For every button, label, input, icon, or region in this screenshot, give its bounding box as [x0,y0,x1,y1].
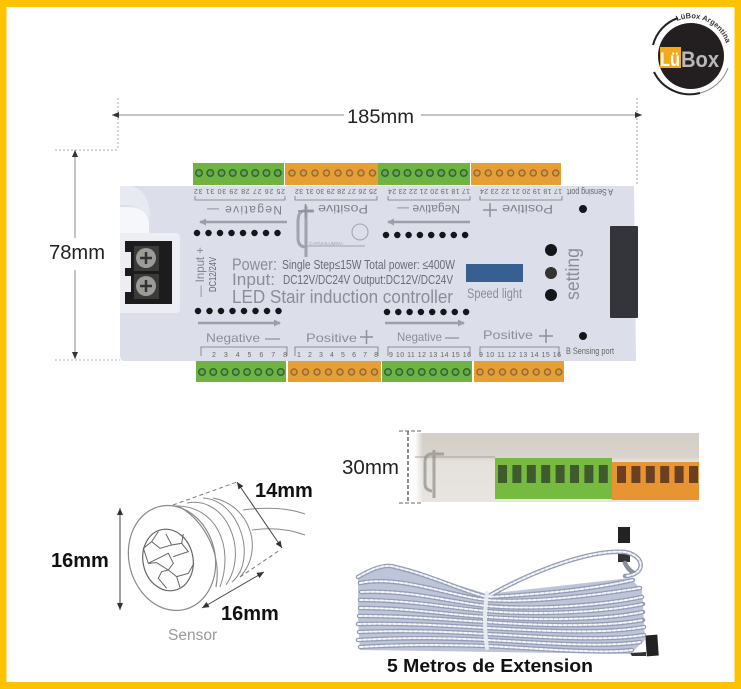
top labels upside down: Negative — [397,202,460,216]
specifications text: LED Stair induction controller [232,286,453,307]
speed display [466,264,523,301]
LED extension cable [358,527,659,656]
label: 14mm: 14mm [255,480,313,502]
top labels upside down: Positive [318,202,368,216]
input voltage label: DC12/24V [208,257,219,292]
logo: LuBox Argentina [652,13,730,96]
dimension: 78mm height: 78mm [49,242,105,264]
screw terminal [125,241,172,304]
bottom labels: Positive [483,328,533,342]
specifications text: Power: [232,255,277,274]
side connector [610,226,638,318]
dimension: 30mm depth [342,431,423,503]
bottom labels: 9 10 11 12 13 14 15 16 [479,352,561,359]
bottom labels: Negative [206,331,260,345]
input voltage label: — Input + [193,247,207,297]
label: 16mm diameter: 16mm [51,550,109,572]
specifications text: Single Step≤15W Total power: ≤400W [282,257,456,272]
top labels upside down [194,187,613,218]
bottom labels: 2 3 4 5 6 7 8 [212,352,287,359]
top labels upside down: Negative — [207,203,282,217]
logo: LuBox Argentina: Box [681,47,720,72]
bottom labels [201,328,614,359]
sensor diagram [51,480,313,644]
dimension: 185mm width: 185mm [347,106,414,128]
logo: LuBox Argentina: LüBox Argentina [676,13,730,44]
dimension: 30mm depth: 30mm [342,457,399,479]
speed display: Speed light [467,286,522,301]
logo: LuBox Argentina: Lü [660,50,680,71]
bottom labels: 1 2 3 4 5 6 7 8 [297,352,378,359]
cable coil [358,565,645,654]
top labels upside down: 25 26 27 28 29 30 31 32 [194,187,285,194]
top labels upside down: 17 18 19 20 21 22 23 24 [388,187,470,194]
setting buttons [545,205,587,340]
controller board [120,163,638,382]
top labels upside down: Positive [502,202,553,216]
watermark: CARNAILUMINA [309,241,343,246]
sockets and arrows [197,222,470,323]
input voltage label [193,247,219,297]
top labels upside down: 17 18 19 20 21 22 23 24 [480,187,562,194]
specifications text: Input: [232,270,275,289]
bottom labels: B Sensing port [566,346,614,356]
specifications text: DC12V/DC24V Output:DC12V/DC24V [283,272,453,287]
specifications text [232,255,456,307]
top terminal blocks [193,163,561,185]
top labels upside down: A Sensing port [567,187,613,197]
caption: 5 Metros de Extension: 5 Metros de Extension [387,655,593,676]
bottom labels: Negative [397,330,442,344]
label: sensor: Sensor [168,627,217,644]
controller side view [415,433,699,502]
top labels upside down: 25 26 27 28 29 30 31 32 [295,187,377,194]
board body [120,186,636,361]
bottom labels: Positive [306,331,357,345]
watermark [298,206,368,257]
label: 16mm length: 16mm [221,603,279,625]
bottom labels: 9 10 11 12 13 14 15 16 [389,352,471,359]
cable connectors [618,527,659,656]
setting buttons: setting [563,248,584,300]
bottom terminal blocks [196,360,564,382]
